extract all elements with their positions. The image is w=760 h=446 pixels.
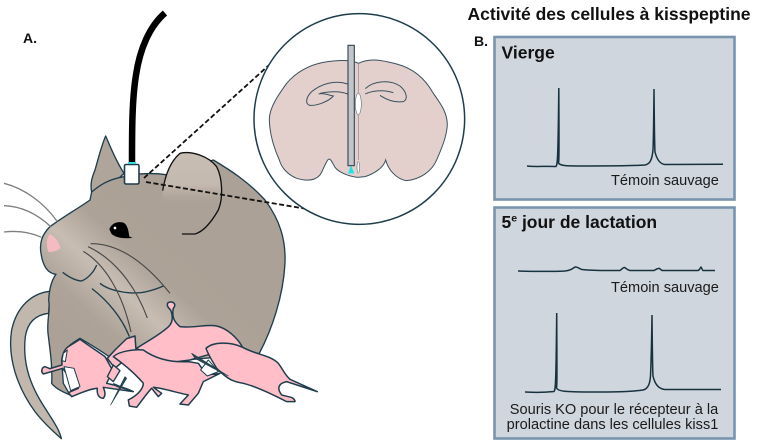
- nose: [47, 234, 61, 252]
- right ear outline: [163, 153, 222, 234]
- trace: spikes: [527, 88, 723, 166]
- trace: control, small spikes: [518, 267, 715, 271]
- pup: white gap: [201, 360, 218, 376]
- panel heading: 5: [502, 212, 511, 232]
- inset: brain section circle: [254, 14, 465, 224]
- pup: right: [206, 343, 317, 402]
- left ear: [91, 136, 124, 193]
- pups: [42, 302, 317, 407]
- pup: left: [42, 339, 133, 398]
- trace label: control: Témoin sauvage: [611, 280, 719, 296]
- trace label: knockout: Souris KO pour le récepteur à la: [510, 402, 719, 418]
- panel: Vierge: [494, 37, 734, 200]
- back whiskers: [4, 183, 57, 237]
- label: A: A.: [23, 30, 37, 46]
- trace: knockout, spikes: [525, 313, 721, 392]
- pup: middle: [113, 350, 220, 407]
- label: B: B.: [474, 33, 488, 49]
- left hippocampus: [307, 82, 348, 105]
- right hippocampus: [365, 82, 406, 102]
- panel heading: jour de lactation: [517, 212, 657, 232]
- icon: optic fibre cable: [132, 13, 165, 163]
- pup: tail tips: [111, 353, 228, 405]
- midline and ventricles: [357, 64, 359, 160]
- panel heading: e: [511, 212, 517, 224]
- illustration: mouse with pups: [4, 136, 317, 439]
- inset: zoom lines: [144, 57, 319, 211]
- mouth: [63, 265, 97, 281]
- light spot: [348, 165, 354, 173]
- pup: top: [137, 302, 243, 363]
- panel: 5e jour de lactation: [494, 208, 734, 438]
- pup: white sliver: [107, 365, 120, 382]
- tail: [11, 291, 61, 439]
- trace label: Témoin sauvage: [611, 173, 719, 189]
- front leg lines: [92, 283, 163, 337]
- panel heading: Vierge: [502, 42, 555, 62]
- brain slice: [269, 60, 447, 181]
- pup: small muzzle: [107, 336, 136, 368]
- icon: fibre implant: [124, 162, 139, 184]
- pup: left white gap: [62, 350, 80, 391]
- panel: 5e jour de lactation: prolactine dans les cellules kiss1: [507, 417, 718, 433]
- front whiskers: [83, 244, 170, 332]
- body: [40, 160, 285, 395]
- eye: [109, 222, 133, 238]
- title: Activité des cellules à kisspeptine: [468, 4, 751, 24]
- optic fibre: [348, 45, 354, 166]
- right ear: [163, 153, 222, 210]
- third ventricle: [355, 93, 361, 115]
